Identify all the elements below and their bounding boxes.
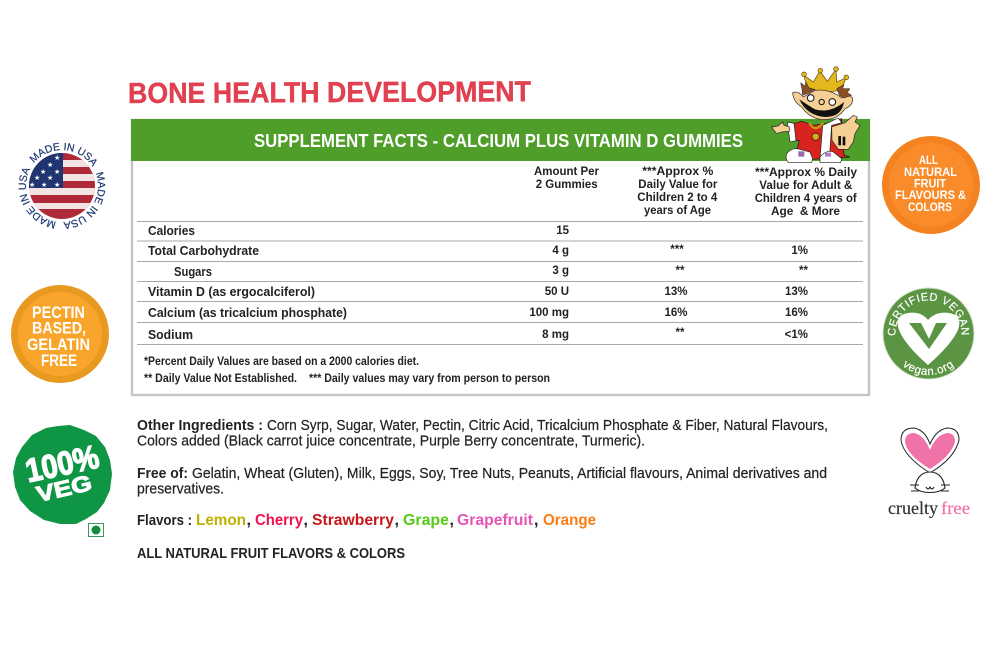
text: other ingredients: Other Ingredients : bbox=[137, 418, 263, 434]
row: calories: Calories bbox=[148, 224, 195, 238]
text: flavors bbox=[137, 512, 596, 529]
text: flavors: Strawberry bbox=[312, 512, 394, 529]
robe bbox=[788, 119, 850, 159]
icon: us flag: ★ bbox=[41, 181, 47, 189]
crown bbox=[804, 69, 846, 93]
icon: us flag: ★ bbox=[47, 161, 53, 169]
row: sodium bbox=[148, 327, 808, 342]
row: sodium: ** bbox=[676, 327, 685, 339]
icon: us flag: ★ bbox=[34, 174, 40, 182]
text: free of: Gelatin, Wheat (Gluten), Milk, Eggs, Soy, Tree Nuts, Peanuts, Artificial flavours, Animal derivatives and bbox=[192, 466, 827, 482]
column head: children bbox=[637, 164, 718, 217]
row: calcium: Calcium (as tricalcium phosphate) bbox=[148, 306, 347, 320]
column head: amount: Amount Per bbox=[534, 164, 599, 178]
badge: all natural: COLORS bbox=[908, 200, 952, 214]
badge: 100% veg bbox=[13, 425, 112, 524]
icon: vegetarian mark bbox=[88, 524, 104, 536]
logotype: free bbox=[941, 498, 970, 518]
text: flavors: , bbox=[534, 512, 538, 529]
column head: adults bbox=[755, 165, 858, 218]
column head: amount bbox=[534, 164, 599, 191]
row: sodium: 8 mg bbox=[542, 329, 569, 341]
row: calories: 15 bbox=[556, 225, 570, 237]
badge: pectin based: BASED, bbox=[32, 320, 86, 338]
icon: us flag: ★ bbox=[47, 174, 53, 182]
row: total carbohydrate: *** bbox=[670, 244, 684, 256]
icon: bunny ears bbox=[901, 428, 959, 473]
row: calcium: 16% bbox=[664, 307, 688, 319]
row: vitamin d: 13% bbox=[785, 286, 808, 298]
badge: made in usa bbox=[18, 142, 106, 229]
footnotes: ** Daily Value Not Established. bbox=[144, 373, 297, 385]
logotype bbox=[888, 498, 970, 518]
column head: adults: Value for Adult & bbox=[759, 178, 853, 192]
text: other ingredients: Colors added (Black carrot juice concentrate, Purple Berry concentrate, Turmeric). bbox=[137, 434, 645, 450]
row: calcium: 100 mg bbox=[529, 307, 569, 319]
badge: made in usa: MADE IN USA bbox=[63, 172, 106, 229]
text: free of: preservatives. bbox=[137, 482, 224, 498]
icon: us flag bbox=[29, 153, 95, 219]
row: calcium: 16% bbox=[785, 307, 808, 319]
badge: all natural: FLAVOURS & bbox=[895, 188, 966, 202]
text: flavors: Lemon bbox=[196, 512, 246, 529]
icon: us flag: ★ bbox=[54, 154, 60, 162]
logotype: cruelty bbox=[888, 498, 938, 518]
badge: pectin based bbox=[11, 285, 109, 383]
badge: 100% veg: VEG bbox=[34, 470, 94, 507]
ring text: MADE IN USA bbox=[29, 142, 97, 167]
column head: amount: 2 Gummies bbox=[536, 177, 598, 191]
infographic canvas bbox=[11, 66, 980, 558]
badge: all natural: NATURAL bbox=[904, 165, 957, 179]
title: BONE HEALTH DEVELOPMENT bbox=[128, 76, 531, 110]
row: sugars bbox=[174, 265, 809, 279]
badge: certified vegan bbox=[882, 288, 974, 380]
badge: 100% veg: 100% bbox=[22, 438, 102, 489]
icon: king mascot bbox=[772, 67, 860, 163]
badge: all natural bbox=[882, 136, 980, 234]
text: flavors: Cherry bbox=[255, 512, 303, 529]
icon: us flag: ★ bbox=[40, 168, 46, 176]
column head: children: years of Age bbox=[644, 203, 711, 217]
icon: us flag: ★ bbox=[29, 181, 35, 189]
row: sugars: ** bbox=[799, 265, 809, 277]
face bbox=[793, 90, 853, 120]
badge: certified vegan: CERTIFIED VEGAN bbox=[888, 292, 970, 336]
footnotes bbox=[144, 356, 550, 385]
text: flavors: , bbox=[246, 512, 251, 529]
footnotes: *Percent Daily Values are based on a 2000 calories diet. bbox=[144, 356, 419, 368]
header bar bbox=[131, 119, 870, 161]
column head: adults: ***Approx % Daily bbox=[755, 165, 857, 179]
row: sugars: ** bbox=[676, 265, 685, 277]
column head: children: ***Approx % bbox=[642, 164, 714, 178]
icon: bunny face bbox=[910, 472, 950, 492]
text: free of: Free of: bbox=[137, 466, 188, 482]
row: calories bbox=[148, 224, 570, 238]
badge: cruelty free bbox=[888, 428, 970, 518]
mouth bbox=[799, 99, 844, 117]
text: other ingredients bbox=[137, 418, 828, 450]
text: all natural line: ALL NATURAL FRUIT FLAVORS & COLORS bbox=[137, 546, 405, 562]
text: flavors: Grapefruit bbox=[457, 512, 534, 529]
panel frame bbox=[132, 120, 869, 395]
badge: all natural: ALL bbox=[919, 153, 938, 167]
row: vitamin d: 13% bbox=[664, 286, 688, 298]
text: flavors: , bbox=[394, 512, 399, 529]
badge: pectin based: GELATIN bbox=[27, 336, 90, 354]
text: free of bbox=[137, 466, 827, 498]
badge: all natural: FRUIT bbox=[914, 176, 947, 190]
badge: pectin based: FREE bbox=[41, 352, 77, 370]
badge: pectin based: PECTIN bbox=[32, 304, 85, 322]
row: total carbohydrate: Total Carbohydrate bbox=[148, 244, 259, 258]
row: vitamin d: 50 U bbox=[545, 286, 569, 298]
text: flavors: Grape bbox=[403, 512, 449, 529]
hair bbox=[801, 82, 852, 98]
column head: adults: Age & More bbox=[771, 204, 840, 218]
text: flavors: , bbox=[304, 512, 308, 529]
footnotes: *** Daily values may vary from person to person bbox=[309, 373, 550, 385]
row: vitamin d bbox=[148, 285, 808, 299]
panel: supplement facts bbox=[131, 119, 870, 395]
icon: us flag: ★ bbox=[54, 168, 60, 176]
row: sugars: Sugars bbox=[174, 265, 212, 279]
row: sodium: <1% bbox=[785, 329, 808, 341]
text: flavors: , bbox=[450, 512, 454, 529]
row: total carbohydrate bbox=[148, 244, 808, 258]
text: flavors: Flavors : bbox=[137, 513, 192, 529]
badge: certified vegan: vegan.org bbox=[904, 360, 954, 376]
row: total carbohydrate: 4 g bbox=[552, 245, 569, 257]
icon: us flag: ★ bbox=[54, 181, 60, 189]
row: vitamin d: Vitamin D (as ergocalciferol) bbox=[148, 285, 315, 299]
column head: children: Daily Value for bbox=[638, 177, 718, 191]
row: total carbohydrate: 1% bbox=[791, 245, 808, 257]
row: sodium: Sodium bbox=[148, 328, 193, 342]
text: other ingredients: Corn Syrp, Sugar, Water, Pectin, Citric Acid, Tricalcium Phosphate & Fiber, Natural Flavours, bbox=[267, 418, 828, 434]
text: flavors: Orange bbox=[543, 512, 596, 529]
row: sugars: 3 g bbox=[552, 265, 569, 277]
column head: adults: Children 4 years of bbox=[755, 191, 858, 205]
row: calcium bbox=[148, 306, 808, 320]
header text: SUPPLEMENT FACTS - CALCIUM PLUS VITAMIN D GUMMIES bbox=[254, 131, 743, 151]
column head: children: Children 2 to 4 bbox=[637, 190, 718, 204]
badge: made in usa: MADE IN USA bbox=[18, 168, 56, 229]
